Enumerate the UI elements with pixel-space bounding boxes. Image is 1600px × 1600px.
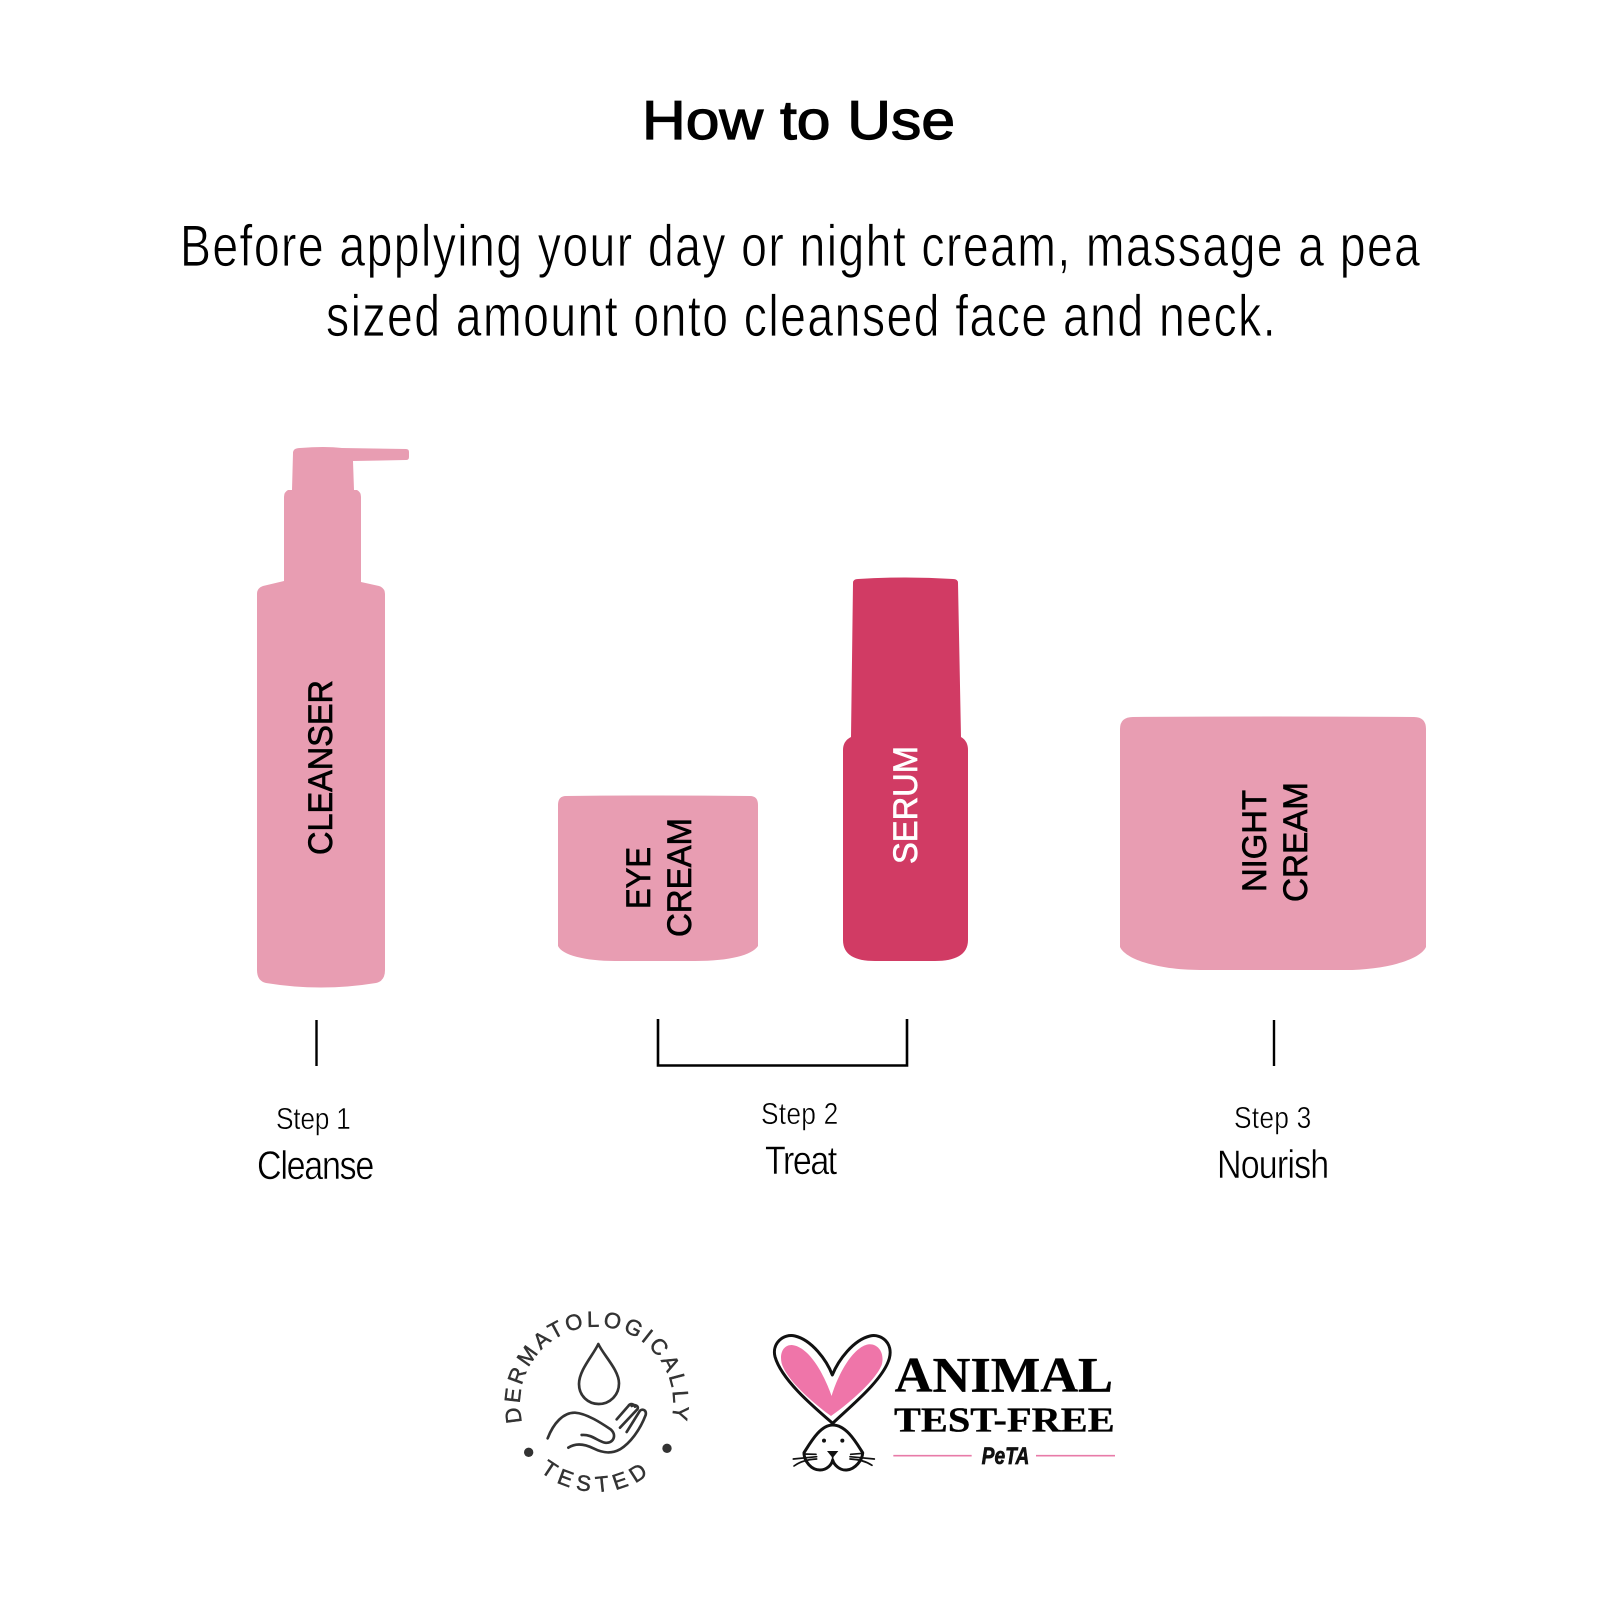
- step 3 connector: [1273, 1020, 1275, 1066]
- badge: peta animal test-free: PeTA: [982, 1443, 1029, 1470]
- badge: dermatologically tested: DERMATOLOGICALLY: [504, 1311, 690, 1423]
- step 1 connector: [315, 1020, 318, 1066]
- badge: peta animal test-free: ANIMAL: [895, 1347, 1113, 1403]
- product: eye cream jar: EYE: [620, 847, 658, 909]
- product: cleanser bottle: CLEANSER: [302, 680, 340, 855]
- step 3 label: [1217, 1101, 1329, 1187]
- step 2 label: Treat: [765, 1137, 838, 1183]
- intro text: [180, 214, 1421, 349]
- intro text: sized amount onto cleansed face and neck.: [326, 284, 1276, 349]
- badge: peta animal test-free: TEST-FREE: [894, 1401, 1115, 1440]
- intro text: Before applying your day or night cream, massage a pea: [180, 214, 1421, 279]
- step 3 label: Step 3: [1234, 1101, 1311, 1136]
- product: night cream jar: [1120, 716, 1426, 970]
- badge: dermatologically tested: [504, 1311, 690, 1492]
- product: night cream jar: NIGHT: [1236, 790, 1274, 892]
- product: cleanser bottle: [257, 447, 409, 988]
- badge: dermatologically tested: TESTED: [544, 1459, 646, 1492]
- step 2 label: [761, 1097, 838, 1183]
- title: How to Use: [642, 89, 955, 151]
- product: serum bottle: SERUM: [887, 746, 925, 864]
- step 1 label: Cleanse: [257, 1142, 374, 1188]
- step 3 label: Nourish: [1217, 1141, 1329, 1187]
- step 1 label: Step 1: [276, 1102, 351, 1137]
- product: eye cream jar: [558, 796, 758, 961]
- badge: peta animal test-free: [774, 1336, 1115, 1470]
- step 2 label: Step 2: [761, 1097, 838, 1132]
- step 1 label: [257, 1102, 374, 1188]
- product: serum bottle: [843, 578, 968, 961]
- product: eye cream jar: CREAM: [661, 818, 699, 937]
- product: night cream jar: CREAM: [1277, 782, 1315, 902]
- step 2 bracket: [658, 1019, 907, 1066]
